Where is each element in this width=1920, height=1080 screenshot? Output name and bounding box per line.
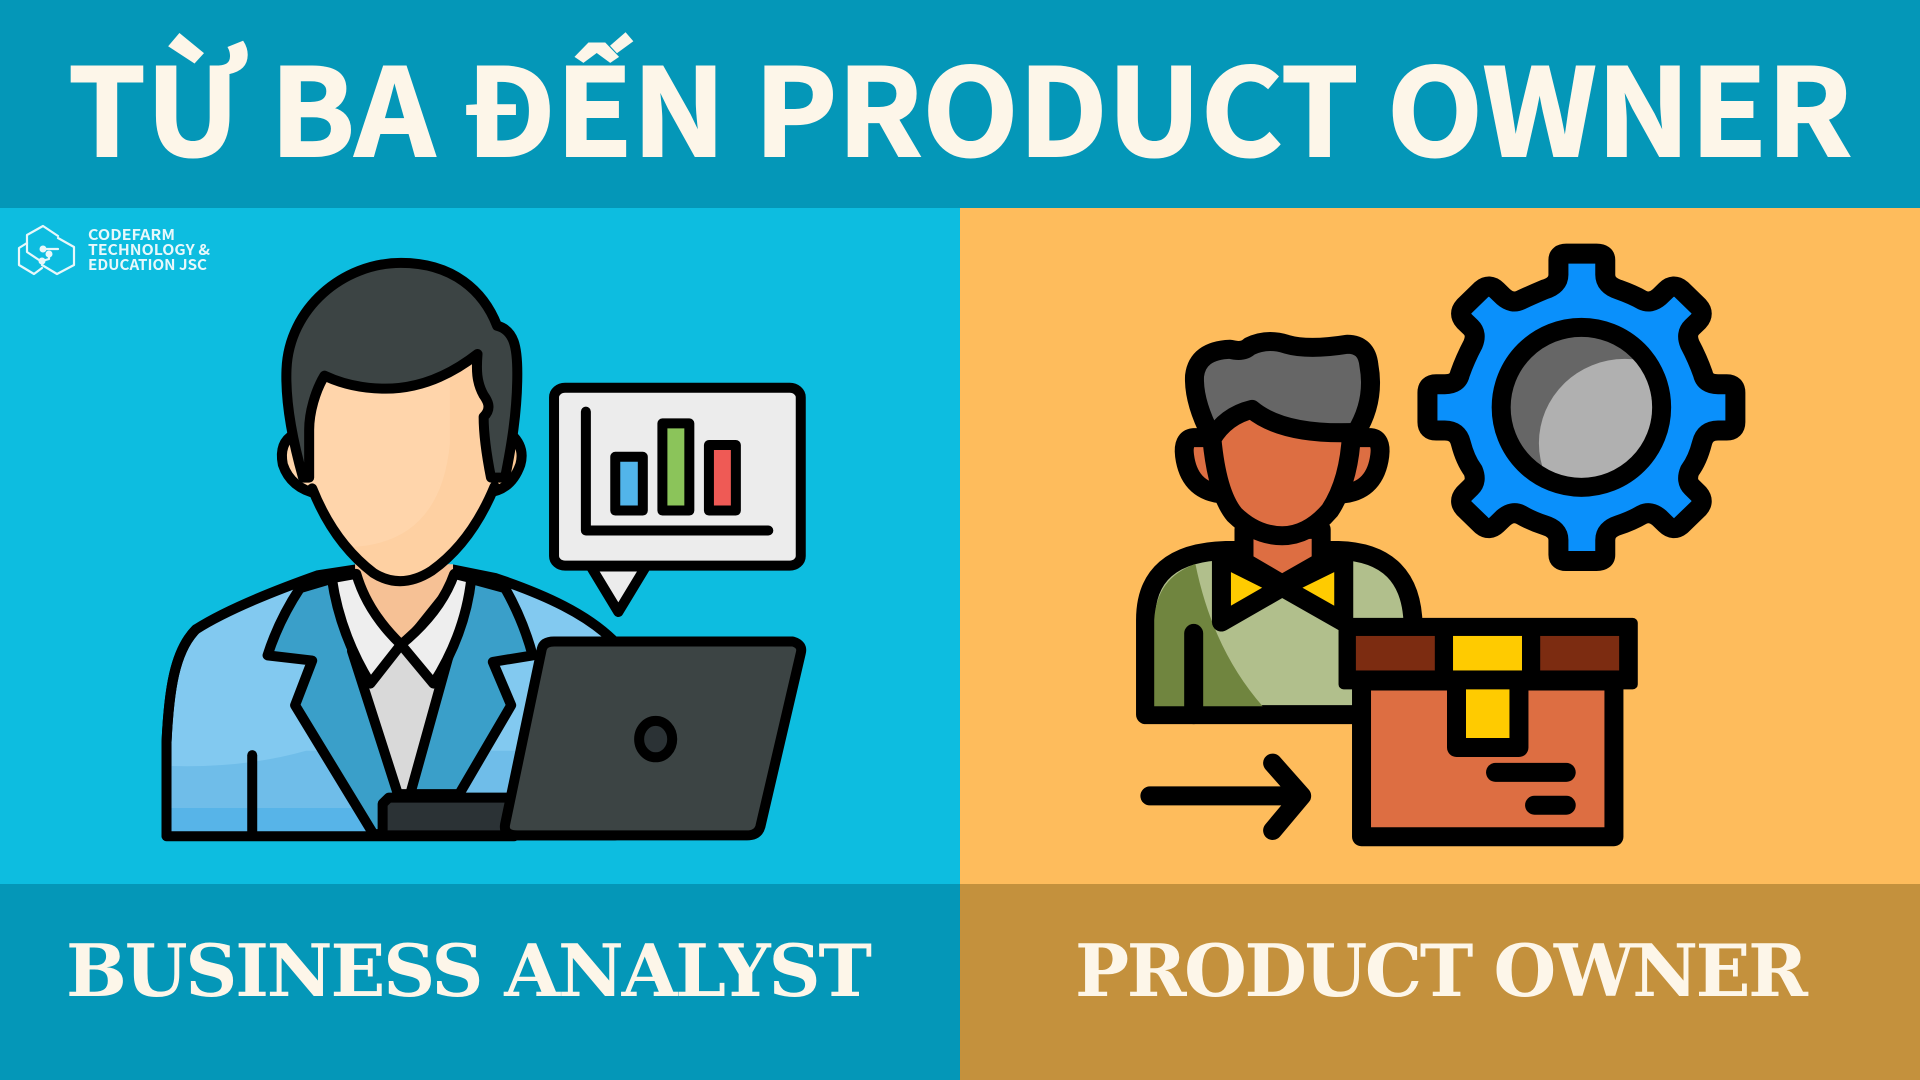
jacket	[167, 570, 615, 835]
arrow	[1150, 763, 1302, 830]
logo: codefarm	[19, 224, 210, 275]
collar	[332, 574, 471, 684]
label: product owner: PRODUCT OWNER	[1075, 928, 1809, 1013]
illustration: product owner with gear and box	[1146, 254, 1735, 837]
label: business analyst: BUSINESS ANALYST	[66, 928, 872, 1013]
icon: hexagon logo	[19, 226, 74, 274]
logo text	[88, 224, 210, 275]
hair	[286, 263, 517, 478]
bar: blue	[615, 457, 643, 511]
gear	[1427, 254, 1735, 561]
laptop	[505, 642, 801, 835]
panel: product owner background	[960, 208, 1920, 884]
neck	[1244, 529, 1321, 584]
face	[309, 354, 495, 581]
ears	[1184, 438, 1380, 494]
collar	[1221, 557, 1344, 622]
lapels	[268, 578, 533, 834]
keyboard	[383, 798, 514, 835]
neck	[355, 564, 453, 642]
face	[1212, 409, 1352, 536]
title: TỪ BA ĐẾN PRODUCT OWNER	[68, 16, 1852, 191]
chart axes	[586, 412, 768, 530]
box body	[1362, 681, 1614, 837]
shirt	[352, 642, 450, 794]
box lid	[1339, 618, 1638, 689]
ears	[282, 434, 522, 494]
torso	[1146, 550, 1413, 715]
speech bubble	[554, 388, 801, 612]
logo text: EDUCATION JSC	[88, 254, 207, 275]
box tape	[1457, 679, 1519, 748]
footer band: product owner	[960, 884, 1920, 1080]
footer band: business analyst	[0, 884, 960, 1080]
hair	[1194, 341, 1371, 435]
logo text: TECHNOLOGY &	[88, 239, 210, 260]
bar: red	[709, 445, 736, 511]
logo text: CODEFARM	[88, 224, 175, 245]
header band	[0, 0, 1920, 208]
body baseline	[167, 831, 514, 841]
bar: green	[662, 423, 689, 511]
illustration: business analyst with laptop	[167, 263, 801, 836]
box label lines	[1496, 772, 1566, 805]
panel: business analyst background	[0, 208, 960, 884]
